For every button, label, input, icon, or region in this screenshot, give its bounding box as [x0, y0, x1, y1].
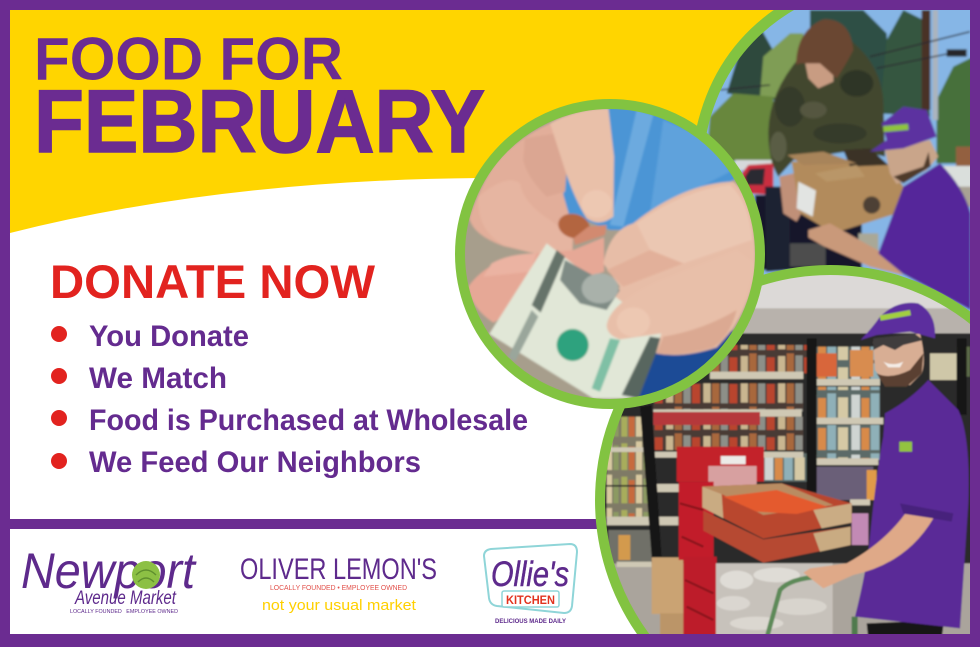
icon: artichoke: [132, 561, 160, 589]
photo: volunteers loading a box: [706, 10, 970, 312]
parked cars: [735, 160, 773, 195]
boxes of tomatoes: [702, 483, 852, 563]
title line one: FOOD FOR: [34, 26, 343, 92]
shelf edges: [607, 372, 883, 567]
logo: Ollie's Kitchen: DELICIOUS MADE DAILY: [495, 618, 567, 625]
lower left fingers: [468, 237, 604, 323]
egg cartons on cart: [716, 563, 858, 640]
penny: [555, 210, 607, 245]
title: [34, 26, 485, 171]
fence and white bins: [943, 147, 973, 207]
employee in purple polo: [803, 303, 969, 640]
dollar bill: [489, 243, 662, 398]
stacked red crates: [677, 447, 764, 640]
photo: employee with grocery cart: [590, 270, 980, 640]
logo: Newport Avenue Market: Newport: [21, 543, 197, 599]
shelves of bottles: [607, 345, 970, 563]
thumb over bill: [606, 302, 736, 358]
bullet: feed neighbors: We Feed Our Neighbors: [89, 446, 421, 479]
bullet: we match: We Match: [89, 362, 227, 395]
bulleted list: [51, 320, 528, 479]
logo: Oliver Lemon's: [240, 553, 437, 614]
person in purple polo and cap: [808, 107, 971, 310]
logo: Ollie's Kitchen: KITCHEN: [506, 593, 555, 607]
heading: donate now: DONATE NOW: [50, 255, 376, 308]
donation band: [10, 519, 610, 529]
logo: Ollie's Kitchen: [484, 544, 577, 625]
fridge door posts: [640, 338, 967, 557]
green arc: top photo edge: [698, 3, 795, 150]
logo: Newport Avenue Market: Avenue Market: [74, 588, 177, 609]
store ceiling and fridge background: [590, 270, 980, 640]
logo: Oliver Lemon's: OLIVER LEMON'S: [240, 553, 437, 586]
bullet: you donate: You Donate: [89, 320, 249, 353]
logo: Newport Avenue Market: LOCALLY FOUNDED EMPLOYEE OWNED: [70, 609, 178, 615]
logo: Oliver Lemon's: not your usual market: [262, 597, 417, 614]
person in camo hoodie: [765, 19, 885, 272]
logo: Ollie's Kitchen: Ollie's: [491, 555, 569, 594]
yellow header shape: [10, 10, 800, 233]
cardboard boxes on floor: [652, 557, 687, 640]
truck bed: [755, 195, 878, 270]
cardboard box: [787, 148, 903, 233]
upper hand: [469, 108, 614, 254]
trees: [707, 10, 973, 163]
sky: [706, 10, 970, 312]
green ring: hands photo: [460, 104, 760, 404]
title line two: FEBRUARY: [34, 71, 485, 171]
bullet: food purchased: Food is Purchased at Wholesale: [89, 404, 528, 437]
utility poles: [720, 10, 970, 120]
right palm: [603, 182, 755, 355]
blue shirt: [562, 109, 735, 396]
backdrop: [465, 109, 755, 399]
green ring: lower photo edge: [600, 270, 975, 640]
photo: hands holding dollar and penny: [465, 109, 755, 399]
logo: Oliver Lemon's: LOCALLY FOUNDED • EMPLOYEE OWNED: [270, 583, 407, 592]
